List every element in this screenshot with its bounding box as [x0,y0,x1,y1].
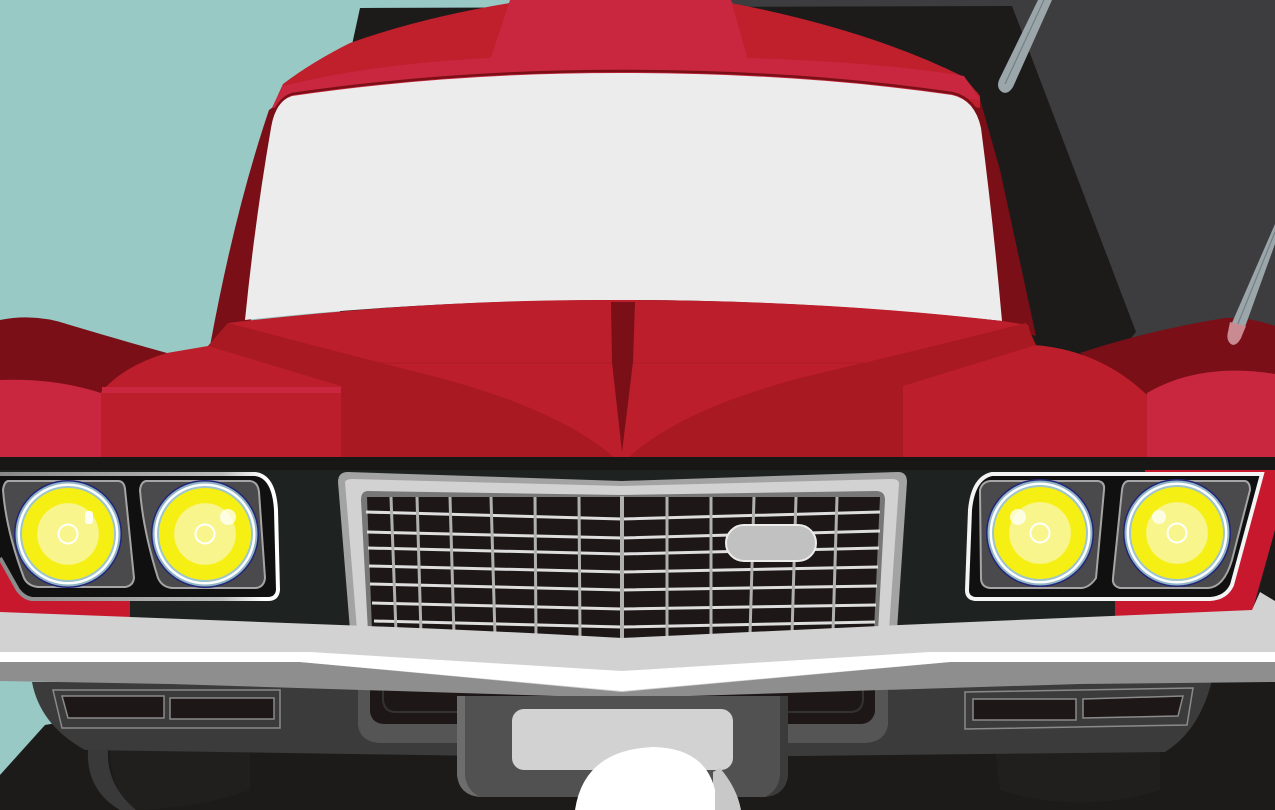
car: wheel arch left [0,317,167,400]
car: license plate mount [457,696,788,797]
car: red panel right [1115,470,1275,620]
car: windshield top seal [270,71,983,126]
car: outer fender right [1147,371,1275,466]
car: license plate [512,709,733,770]
car: lower valance [32,680,1212,758]
grille: dark mesh background [367,497,880,638]
car: roof [272,0,980,108]
headlight: inner right [980,479,1104,588]
headlight: far right [1113,479,1250,588]
wiper: left [998,0,1052,93]
car: red panel left [0,555,130,618]
headlight: inner left [140,480,265,588]
object: round white ball [575,747,741,810]
car: wheel arch right [1080,318,1275,400]
car: windshield pillar left [210,95,290,346]
vent: right [965,688,1193,729]
car: central air intake [358,688,888,743]
headlight frame: right [967,474,1262,599]
headlight frame: left [0,474,278,599]
grille: oval badge [726,525,816,561]
wiper: right [1227,224,1275,345]
car: windshield pillar right [965,92,1036,336]
car: right edge dark corner [1258,530,1275,606]
car: hood [101,300,1147,460]
car: wheels and tyres [88,750,1160,810]
car: outer fender left [0,380,101,466]
car: bumper [0,592,1275,698]
car: windshield [245,73,1002,321]
headlight: far left [3,480,134,588]
grille: vertical bars [391,496,837,639]
grille: chrome surround [338,472,907,632]
vent: left [53,690,280,728]
car: front fascia panel [0,470,1275,630]
car: front fascia black band [0,457,1275,473]
grille: horizontal bars [366,512,880,627]
background: dark grey wall [730,0,1275,400]
